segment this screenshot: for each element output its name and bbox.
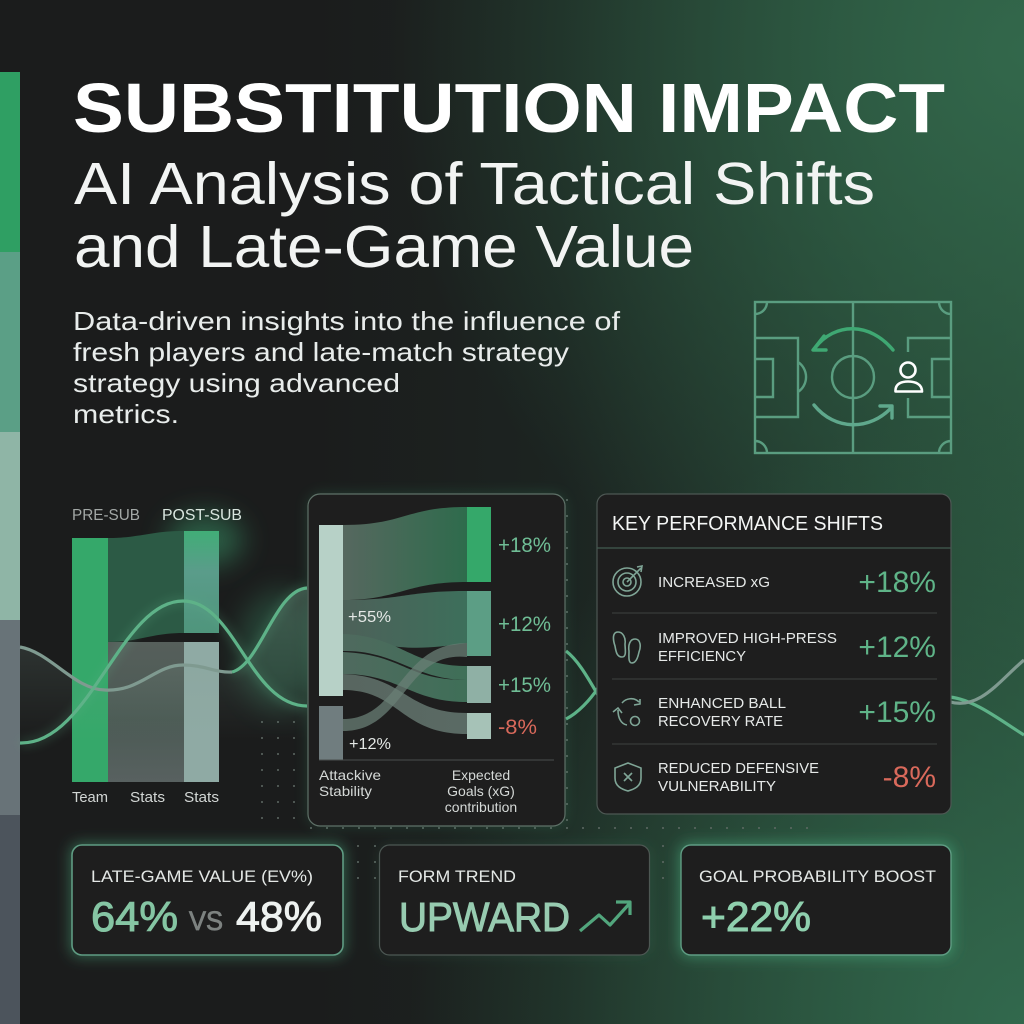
- row: high press: [613, 631, 936, 665]
- axis labels: Team: [72, 790, 108, 806]
- sankey ribbons: [343, 507, 467, 734]
- card: goal probability boost: [681, 845, 951, 955]
- flows: [108, 531, 184, 782]
- row: recovery: ENHANCED BALL: [658, 696, 786, 712]
- card: goal probability boost: +22%: [701, 893, 811, 940]
- icon: footprints: [613, 632, 640, 663]
- sankey flow labels: +55%: [348, 609, 391, 626]
- card: form trend: UPWARD: [399, 894, 570, 940]
- intro paragraph: Data-driven insights into the influence of: [73, 306, 621, 336]
- wave lines: [20, 588, 1024, 743]
- row: vulnerability: [615, 761, 936, 795]
- sankey axis labels: contribution: [445, 799, 517, 815]
- card: late-game value: 64%: [91, 893, 178, 940]
- card: late-game value: LATE-GAME VALUE (EV%): [91, 867, 313, 886]
- row: recovery: RECOVERY RATE: [658, 714, 783, 730]
- panel heading: KEY PERFORMANCE SHIFTS: [612, 513, 883, 535]
- sankey axis labels: Attackive: [319, 767, 381, 783]
- sankey flow labels: [348, 609, 391, 753]
- row: high press: +12%: [858, 631, 936, 664]
- sankey values: [498, 534, 551, 739]
- sankey right nodes: [467, 507, 491, 582]
- row: recovery: +15%: [858, 696, 936, 729]
- card: late-game value: [72, 845, 343, 955]
- panel: sankey flows: [308, 494, 565, 826]
- intro paragraph: fresh players and late-match strategy: [73, 337, 569, 367]
- card: form trend: FORM TREND: [398, 867, 516, 886]
- title: [73, 69, 945, 280]
- row: high press: IMPROVED HIGH-PRESS: [658, 631, 837, 647]
- sankey axis labels: [319, 767, 517, 815]
- sankey left nodes: [319, 525, 343, 696]
- title: and Late-Game Value: [74, 214, 694, 280]
- row: vulnerability: -8%: [883, 761, 936, 794]
- post-sub upper bar: [184, 531, 219, 633]
- icon: shield: [615, 763, 641, 791]
- card: form trend: [380, 845, 650, 955]
- left colour strip: [0, 72, 20, 1024]
- title: SUBSTITUTION IMPACT: [73, 69, 945, 147]
- glow behind sankey panel: [308, 494, 565, 826]
- chart: pre-sub vs post-sub: [72, 507, 242, 806]
- axis labels: Stats: [184, 790, 219, 806]
- card: late-game value: VS: [189, 906, 223, 936]
- post-sub lower bar: [184, 642, 219, 782]
- sankey axis labels: Stability: [319, 783, 372, 799]
- icon: target: [613, 566, 642, 596]
- row: vulnerability: VULNERABILITY: [658, 779, 776, 795]
- card: late-game value: 48%: [236, 893, 322, 940]
- row: increased xG: [613, 566, 936, 599]
- intro paragraph: [73, 306, 621, 429]
- sankey flow labels: +12%: [349, 736, 391, 753]
- decorative dot grid: [262, 500, 808, 890]
- sankey axis labels: Goals (xG): [447, 783, 515, 799]
- row: increased xG: +18%: [858, 566, 936, 599]
- sankey values: +12%: [498, 613, 551, 636]
- column headings: [72, 507, 242, 524]
- card: goal probability boost: GOAL PROBABILITY BOOST: [699, 867, 936, 886]
- row: increased xG: INCREASED xG: [658, 575, 770, 591]
- axis labels: Stats: [130, 790, 165, 806]
- title: AI Analysis of Tactical Shifts: [74, 151, 875, 217]
- pre-sub bar: [72, 538, 108, 782]
- icon: recovery arrows: [613, 699, 640, 726]
- intro paragraph: strategy using advanced: [73, 368, 400, 398]
- intro paragraph: metrics.: [73, 399, 179, 429]
- sankey values: +15%: [498, 674, 551, 697]
- icon: trend arrow: [580, 902, 630, 931]
- panel: key performance shifts: [597, 494, 951, 814]
- glow behind bottom cards: [70, 843, 953, 957]
- glow behind post-sub bar: [167, 514, 243, 566]
- sankey axis labels: Expected: [452, 767, 510, 783]
- row: recovery: [613, 696, 936, 730]
- column headings: PRE-SUB: [72, 507, 140, 524]
- row: vulnerability: REDUCED DEFENSIVE: [658, 761, 819, 777]
- row: high press: EFFICIENCY: [658, 649, 746, 665]
- sankey values: +18%: [498, 534, 551, 557]
- axis labels: [72, 790, 219, 806]
- icon: pitch with substitution arrows: [755, 302, 951, 453]
- column headings: POST-SUB: [162, 507, 242, 524]
- sankey values: -8%: [498, 716, 537, 739]
- glow behind waves: [238, 590, 322, 710]
